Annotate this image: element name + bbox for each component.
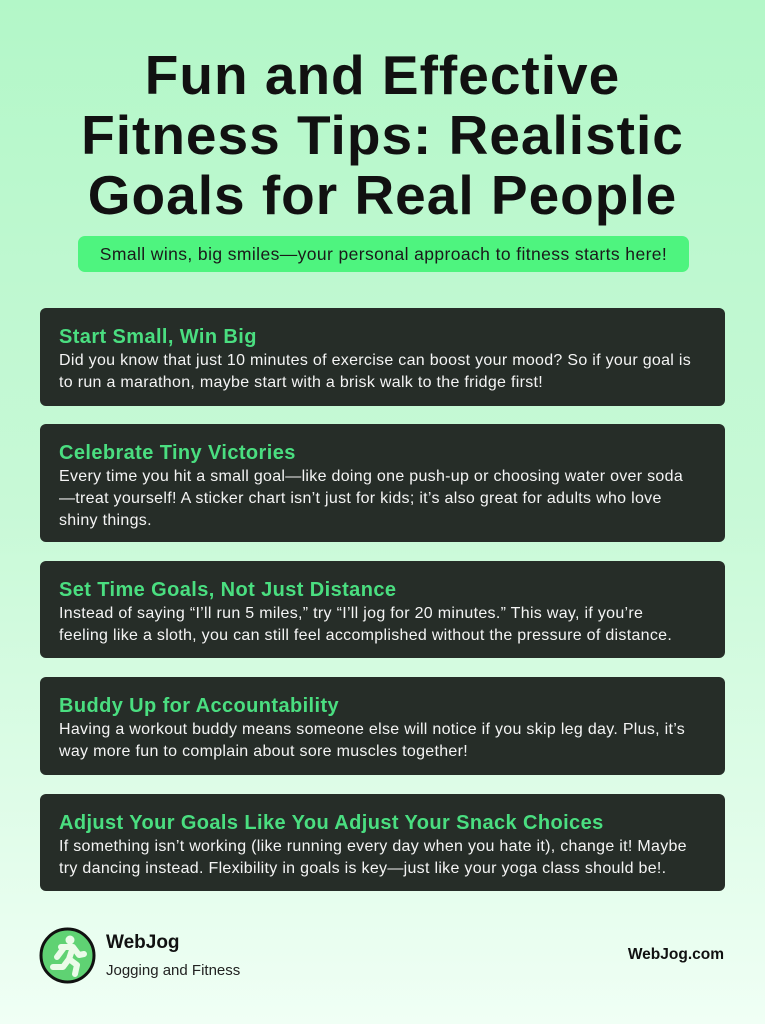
subtitle pill	[78, 236, 689, 272]
card: adjust: Adjust Your Goals Like You Adjust Your Snack Choices	[59, 812, 604, 834]
card: celebrate	[40, 424, 725, 542]
card: start small: Did you know that just 10 minutes of exercise can boost your mood? So if your goal is	[59, 352, 691, 369]
title	[81, 44, 684, 226]
card: buddy: Having a workout buddy means someone else will notice if you skip leg day. Plus, it’s	[59, 721, 685, 738]
card: start small	[40, 308, 725, 406]
card: time goals: Set Time Goals, Not Just Distance	[59, 579, 396, 601]
card: buddy	[40, 677, 725, 775]
card: time goals: feeling like a sloth, you can still feel accomplished without the pressure of distance.	[59, 627, 672, 644]
subtitle pill: Small wins, big smiles—your personal approach to fitness starts here!	[100, 244, 667, 264]
card: buddy: Buddy Up for Accountability	[59, 695, 339, 717]
card: adjust: try dancing instead. Flexibility in goals is key—just like your yoga class should be!.	[59, 860, 666, 877]
title: Fitness Tips: Realistic	[81, 104, 684, 166]
card: celebrate: Celebrate Tiny Victories	[59, 442, 296, 464]
title: Goals for Real People	[88, 164, 677, 226]
card: start small: Start Small, Win Big	[59, 326, 257, 348]
card: celebrate: Every time you hit a small goal—like doing one push-up or choosing water over soda	[59, 468, 683, 485]
icon: logo runner	[40, 928, 96, 984]
website: WebJog.com	[628, 946, 724, 963]
card: buddy: way more fun to complain about sore muscles together!	[59, 743, 468, 760]
card: start small: to run a marathon, maybe start with a brisk walk to the fridge first!	[59, 374, 543, 391]
card: celebrate: shiny things.	[59, 512, 152, 529]
card: time goals: Instead of saying “I’ll run 5 miles,” try “I’ll jog for 20 minutes.” This way, if you’re	[59, 605, 643, 622]
brand name: WebJog	[106, 932, 180, 953]
card: time goals	[40, 561, 725, 658]
brand tagline: Jogging and Fitness	[106, 962, 240, 979]
card: celebrate: —treat yourself! A sticker chart isn’t just for kids; it’s also great for adults who love	[59, 490, 662, 507]
title: Fun and Effective	[145, 44, 620, 106]
card: adjust: If something isn’t working (like running every day when you hate it), change it! Maybe	[59, 838, 687, 855]
card: adjust	[40, 794, 725, 891]
